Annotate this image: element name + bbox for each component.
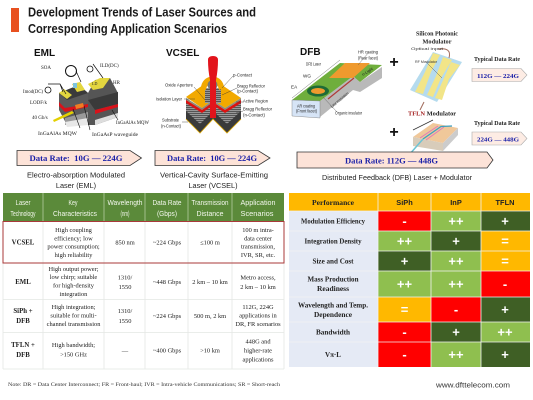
diagram: EML laser structure: 40 Gb/s <box>32 116 48 121</box>
performance rating cells: ++ <box>448 347 464 362</box>
row: VCSEL: high reliability <box>55 252 93 259</box>
row: TFLN + DFB: higher-rate <box>244 348 272 354</box>
diagram: DFB laser: WG <box>303 74 311 78</box>
caption: EML <box>27 170 125 190</box>
table grid <box>3 221 284 369</box>
diagram: silicon photonic modulator <box>410 47 462 110</box>
footnote: Note: DR = Data Center Interconnect; FR = Front-haul; IVR = Intra-vehicle Communications; SR = Short-reach <box>8 382 280 388</box>
performance row labels: Modulation Efficiency <box>301 218 365 226</box>
row: VCSEL: 850 nm <box>115 240 135 246</box>
performance rating cells: + <box>452 324 460 340</box>
table header: Application <box>240 198 276 207</box>
row: VCSEL: High coupling <box>55 227 93 234</box>
diagram: EML laser structure <box>23 64 149 138</box>
row: VCSEL: data center <box>244 236 273 242</box>
performance rating cells: + <box>501 214 509 228</box>
row: EML: 1550 <box>119 284 131 291</box>
table: laser technology comparison <box>3 193 284 369</box>
caption: VCSEL: Vertical-Cavity Surface-Emitting <box>160 170 268 180</box>
caption: VCSEL: Laser (VCSEL) <box>188 181 238 190</box>
arrow: EML data rate <box>17 150 142 166</box>
diagram: EML laser structure: LODF/k <box>30 101 47 106</box>
row: VCSEL: ≤100 m <box>200 240 220 246</box>
diagram: EML laser structure: InGaAsP waveguide <box>92 133 139 138</box>
diagram: EML laser structure: ILD(DC) <box>100 64 119 69</box>
label: silicon photonic modulator <box>416 30 458 46</box>
diagram: VCSEL structure: Isolation Layer <box>156 96 182 102</box>
performance rating cells: = <box>501 254 509 268</box>
diagram: VCSEL structure <box>156 56 273 133</box>
table header: (Gbps) <box>157 209 177 218</box>
diagram: EML laser structure: SOA <box>41 66 51 71</box>
table header: Characteristics <box>53 209 97 218</box>
arrow: EML data rate: Data Rate: 10G — 224G <box>30 154 122 163</box>
heading: VCSEL: VCSEL <box>166 48 199 59</box>
diagram: silicon photonic modulator: Optical input <box>411 47 443 51</box>
diagram: silicon photonic modulator: RF Modulator <box>415 60 438 64</box>
row: VCSEL: efficiency; low <box>54 236 93 242</box>
row: SiPh + DFB: DR, FR scenarios <box>235 321 281 328</box>
arrow: typical data rate 224G to 448G <box>472 132 527 145</box>
performance row labels: Wavelength and Temp. <box>298 302 368 310</box>
label: silicon photonic modulator: Modulator <box>422 38 452 46</box>
diagram: DFB laser: Lase modulation <box>329 91 349 109</box>
performance rating cells: = <box>401 302 409 317</box>
heading: DFB: DFB <box>300 47 321 58</box>
performance rating cells: + <box>501 347 509 362</box>
diagram: DFB laser: EA <box>291 84 298 90</box>
caption: DFB: Distributed Feedback (DFB) Laser + Modulator <box>322 173 473 182</box>
performance row labels <box>289 211 378 367</box>
performance header: TFLN <box>496 198 514 207</box>
row: EML: low chirp; suitable <box>50 274 97 281</box>
row: EML: 1310/ <box>118 274 132 282</box>
performance rating cells: + <box>501 302 509 317</box>
row: EML: High output power; <box>48 266 99 273</box>
title <box>28 6 256 36</box>
table header: Laser <box>16 198 31 207</box>
table header: Data Rate <box>152 198 182 207</box>
label: typical data rate top: Typical Data Rate <box>474 56 520 63</box>
table header: Technology <box>10 209 36 218</box>
panel: EML <box>17 48 149 190</box>
performance rating cells <box>289 193 530 367</box>
row: EML: Metro access, <box>240 274 276 282</box>
diagram: EML laser structure: InGaAlAs MQW <box>38 132 77 137</box>
performance row labels: Integration Density <box>304 238 362 246</box>
diagram: TFLN modulator <box>409 120 458 155</box>
row: EML: 2 km – 10 km <box>240 284 276 291</box>
performance row labels: Size and Cost <box>312 258 354 266</box>
row: VCSEL: transmission, <box>241 244 275 250</box>
diagram: VCSEL structure: p-Contact <box>233 72 253 78</box>
diagram: DFB laser <box>291 50 382 118</box>
arrow: DFB data rate <box>297 152 493 168</box>
row: SiPh + DFB: 112G, 224G <box>242 304 274 311</box>
icon: plus bottom: + <box>389 124 399 141</box>
performance rating cells: ++ <box>448 276 464 292</box>
row: TFLN + DFB: — <box>121 348 129 354</box>
diagram: VCSEL structure: Oxide Aperture <box>165 82 194 88</box>
performance header: Performance <box>312 198 355 207</box>
title accent bar <box>11 8 19 32</box>
performance rating cells: ++ <box>397 234 412 248</box>
performance row labels: Bandwidth <box>316 328 350 336</box>
performance rating cells: ++ <box>448 254 464 268</box>
diagram: DFB laser: (Front facet) <box>296 108 317 114</box>
table header: Transmission <box>192 198 228 207</box>
arrow: DFB data rate: Data Rate: 112G — 448G <box>345 156 438 166</box>
diagram: DFB laser: (Rear facet) <box>358 56 378 60</box>
table header: Scenarios <box>240 209 274 218</box>
row: TFLN + DFB: DFB <box>16 352 30 359</box>
label: TFLN modulator: TFLN Modulator <box>408 110 456 118</box>
caption: VCSEL <box>160 170 268 190</box>
table header: Distance <box>196 209 224 218</box>
performance rating cells: - <box>503 276 507 292</box>
diagram: DFB laser: n-Light <box>361 66 375 77</box>
row: VCSEL: VCSEL <box>12 240 35 246</box>
performance row labels: Mass Production <box>308 276 359 284</box>
row: SiPh + DFB: High integration; <box>52 304 96 311</box>
diagram: EML laser structure: Imod(DC) <box>23 90 43 95</box>
performance header: InP <box>450 198 462 207</box>
table: performance comparison <box>289 193 530 367</box>
diagram: EML laser structure: InGaAlAs MQW <box>116 121 149 126</box>
row: TFLN + DFB: 448G and <box>245 338 271 346</box>
diagram: VCSEL structure: (p-Contact) <box>237 88 259 94</box>
label: typical data rate bottom: Typical Data Rate <box>474 120 520 127</box>
performance rating cells: ++ <box>497 324 513 340</box>
performance row labels: Vπ·L <box>325 351 341 359</box>
title: Development Trends of Laser Sources and <box>28 6 256 20</box>
row: TFLN + DFB: TFLN + <box>11 342 35 349</box>
diagram: VCSEL structure: (n-Contact) <box>161 124 181 128</box>
row: SiPh + DFB: applications in <box>239 312 278 320</box>
diagram: VCSEL structure: (n-Contact) <box>243 112 266 118</box>
caption: EML: Electro-absorption Modulated <box>27 170 125 180</box>
row: SiPh + DFB: SiPh + <box>13 308 33 315</box>
performance row labels: Readiness <box>317 285 349 293</box>
panel: DFB <box>291 30 527 182</box>
highlight: VCSEL row border <box>3 222 284 263</box>
row: VCSEL: 100 m intra- <box>242 227 274 234</box>
row: EML: EML <box>15 279 31 286</box>
performance rating cells: - <box>402 324 407 340</box>
row: EML <box>15 266 276 298</box>
performance rating cells: = <box>501 234 509 248</box>
table header: Key <box>68 198 78 207</box>
caption: EML: Laser (EML) <box>56 181 96 190</box>
performance rating cells: + <box>452 234 460 248</box>
performance rating cells: - <box>402 347 407 362</box>
row: TFLN + DFB <box>11 338 274 364</box>
diagram: DFB laser: HR coating <box>358 50 378 54</box>
arrow: typical data rate 112G to 224G <box>472 68 527 82</box>
panel: VCSEL <box>155 48 273 190</box>
website: www.dfttelecom.com <box>435 382 510 390</box>
row: SiPh + DFB: DFB <box>16 318 30 325</box>
icon: plus top: + <box>389 54 399 71</box>
row: SiPh + DFB: 1310/ <box>118 308 132 315</box>
diagram: DFB laser: DFB Laser <box>306 62 321 66</box>
table header <box>3 193 284 221</box>
diagram: EML laser structure: HR <box>113 81 121 86</box>
performance rating cells: ++ <box>448 214 464 228</box>
diagram: VCSEL structure: Substrate <box>162 118 180 122</box>
row: SiPh + DFB <box>13 304 281 328</box>
table header: Wavelength <box>108 198 142 207</box>
row: EML: integration <box>60 291 88 298</box>
row: SiPh + DFB: 1550 <box>119 318 131 325</box>
performance rating cells: + <box>401 254 409 268</box>
row: VCSEL <box>12 227 276 259</box>
row: TFLN + DFB: ~400 Gbps <box>153 348 182 354</box>
diagram: DFB laser: Organic insulator <box>335 110 362 116</box>
diagram: VCSEL structure: Active Region <box>243 98 269 104</box>
title: Corresponding Application Scenarios <box>28 22 227 36</box>
performance rating cells: ++ <box>397 276 412 292</box>
performance header <box>289 193 530 211</box>
row: SiPh + DFB: channel transmission <box>47 321 101 328</box>
row: EML: 2 km – 10 km <box>192 279 228 286</box>
row: EML: ~448 Gbps <box>153 279 182 286</box>
row: TFLN + DFB: applications <box>243 356 274 364</box>
row: VCSEL: IVR, SR, etc. <box>241 252 276 259</box>
row: SiPh + DFB: 500 m, 2 km <box>194 313 226 320</box>
diagram: DFB laser: AR coating <box>297 104 315 108</box>
arrow: typical data rate 112G to 224G: 112G — 224G <box>477 73 519 80</box>
performance header: SiPh <box>396 198 413 207</box>
diagram: EML laser structure: LD <box>92 81 97 86</box>
diagram: VCSEL structure: Bragg Reflector <box>237 84 265 88</box>
performance rating cells: - <box>402 214 407 228</box>
arrow: VCSEL data rate <box>155 150 270 166</box>
label: silicon photonic modulator: Silicon Photonic <box>416 30 458 38</box>
row: VCSEL: power consumption; <box>47 244 100 250</box>
performance rating cells: - <box>454 302 458 317</box>
arrow: typical data rate 224G to 448G: 224G — 448G <box>477 136 519 144</box>
performance row labels: Dependence <box>314 311 352 319</box>
diagram: VCSEL structure: Bragg Reflector <box>243 106 273 112</box>
row: EML: for high-density <box>53 282 95 290</box>
heading: EML: EML <box>34 48 55 59</box>
row: TFLN + DFB: >150 GHz <box>60 352 87 358</box>
row: SiPh + DFB: suitable for multi- <box>50 312 97 320</box>
row: VCSEL: ~224 Gbps <box>153 240 182 246</box>
arrow: VCSEL data rate: Data Rate: 10G — 224G <box>167 154 257 163</box>
row: SiPh + DFB: ~224 Gbps <box>153 313 182 320</box>
row: TFLN + DFB: >10 km <box>200 348 220 354</box>
table header: (nm) <box>120 209 130 218</box>
row: TFLN + DFB: High bandwidth; <box>52 342 95 349</box>
